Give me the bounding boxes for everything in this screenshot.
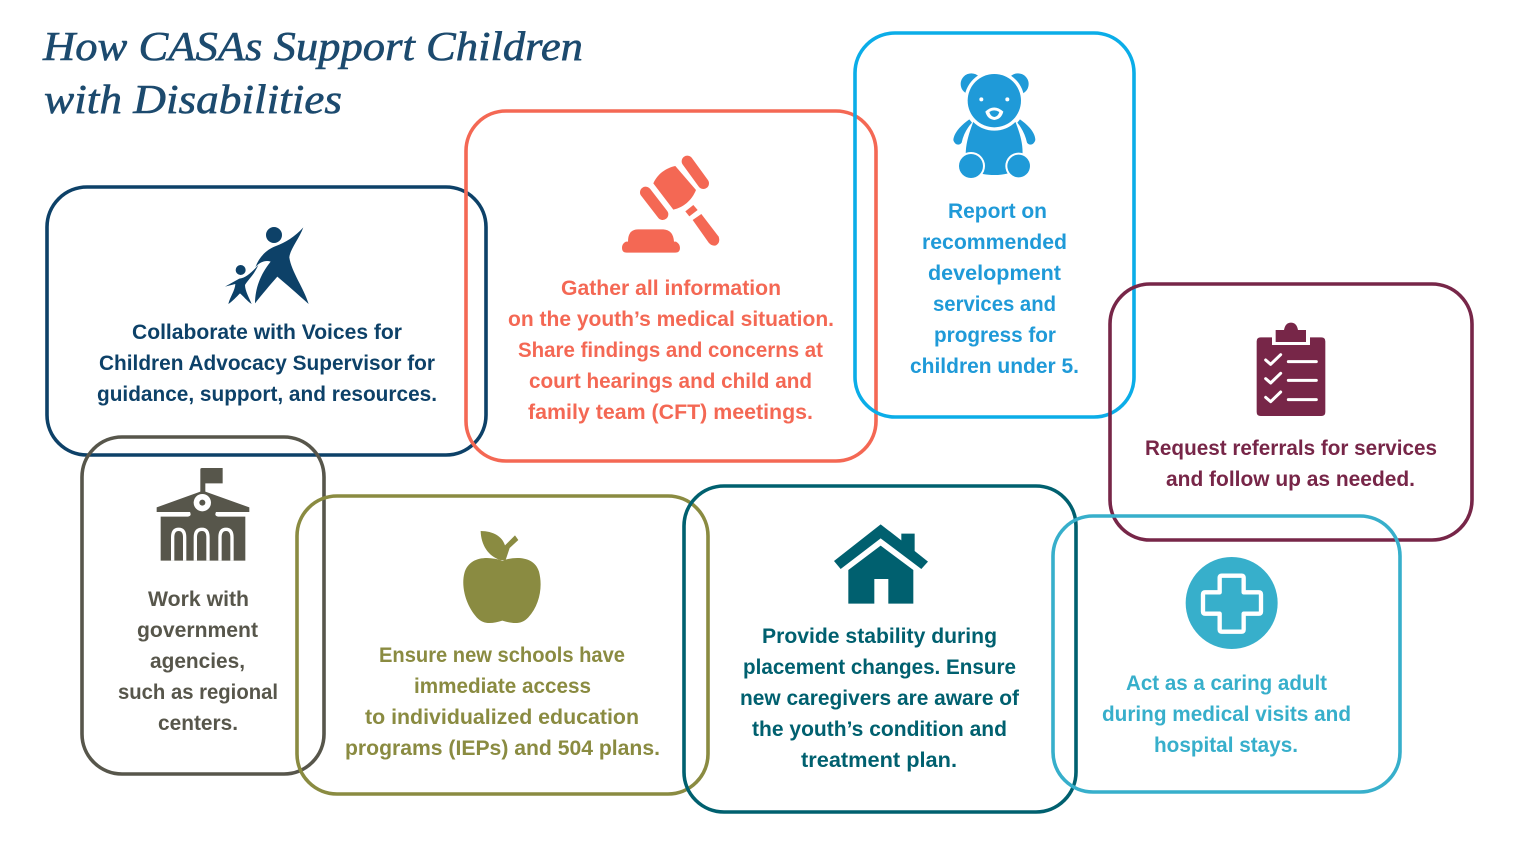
panel: gather information bbox=[466, 111, 876, 461]
text: request referrals bbox=[1145, 436, 1437, 491]
text: gather information: on the youth’s medical situation. bbox=[508, 307, 834, 331]
text: school access: immediate access bbox=[414, 674, 591, 698]
text: caring adult: Act as a caring adult bbox=[1126, 671, 1327, 695]
icon: apple bbox=[463, 531, 541, 623]
text: school access: Ensure new schools have bbox=[379, 643, 625, 667]
text: gather information bbox=[508, 276, 834, 424]
text: government agencies: government bbox=[137, 618, 258, 642]
text: government agencies: such as regional bbox=[118, 680, 278, 704]
text: development services: progress for bbox=[934, 323, 1057, 347]
text: development services: services and bbox=[933, 292, 1056, 316]
title: How CASAs Support Children bbox=[42, 23, 583, 69]
icon: medical cross bbox=[1186, 557, 1278, 649]
text: caring adult: during medical visits and bbox=[1102, 702, 1351, 726]
icon: school building bbox=[157, 468, 249, 561]
text: gather information: court hearings and child and bbox=[529, 369, 812, 393]
title: with Disabilities bbox=[44, 76, 342, 122]
text: caring adult: hospital stays. bbox=[1154, 733, 1298, 757]
text: placement stability: Provide stability during bbox=[762, 624, 997, 648]
text: development services: children under 5. bbox=[910, 354, 1079, 378]
icon: teddy bear bbox=[953, 71, 1035, 180]
icon: gavel bbox=[622, 161, 719, 253]
text: caring adult bbox=[1102, 671, 1351, 757]
text: gather information: family team (CFT) meetings. bbox=[528, 400, 813, 424]
icon: adult and child bbox=[225, 227, 309, 304]
text: placement stability: treatment plan. bbox=[801, 748, 957, 772]
text: collaborate: guidance, support, and resources. bbox=[97, 382, 437, 406]
text: placement stability bbox=[740, 624, 1020, 772]
text: collaborate bbox=[97, 320, 437, 406]
panel: placement stability bbox=[684, 486, 1076, 812]
text: request referrals: and follow up as needed. bbox=[1166, 467, 1415, 491]
panel: collaborate with supervisor bbox=[47, 187, 486, 455]
title bbox=[42, 23, 583, 122]
text: school access: programs (IEPs) and 504 plans. bbox=[345, 736, 660, 760]
panel: caring adult bbox=[1053, 516, 1400, 792]
panel: development services bbox=[855, 33, 1134, 417]
text: placement stability: the youth’s condition and bbox=[752, 717, 1007, 741]
text: government agencies: centers. bbox=[158, 711, 238, 735]
panel: request referrals bbox=[1110, 284, 1472, 540]
icon: house bbox=[834, 524, 928, 604]
text: development services: recommended bbox=[922, 230, 1067, 254]
panel: government agencies bbox=[82, 437, 324, 774]
text: government agencies: Work with bbox=[148, 587, 249, 611]
text: government agencies bbox=[118, 587, 278, 735]
text: collaborate: Collaborate with Voices for bbox=[132, 320, 403, 344]
text: collaborate: Children Advocacy Supervisor for bbox=[99, 351, 436, 375]
panel: school access bbox=[297, 496, 708, 794]
text: placement stability: placement changes. Ensure bbox=[743, 655, 1016, 679]
text: development services: Report on bbox=[948, 199, 1047, 223]
text: gather information: Gather all information bbox=[561, 276, 781, 300]
text: school access: to individualized education bbox=[365, 705, 639, 729]
text: development services bbox=[910, 199, 1079, 378]
text: request referrals: Request referrals for services bbox=[1145, 436, 1437, 460]
text: school access bbox=[345, 643, 660, 760]
text: government agencies: agencies, bbox=[150, 649, 245, 673]
text: placement stability: new caregivers are aware of bbox=[740, 686, 1020, 710]
icon: clipboard bbox=[1257, 323, 1325, 416]
text: gather information: Share findings and concerns at bbox=[518, 338, 823, 362]
text: development services: development bbox=[928, 261, 1061, 285]
